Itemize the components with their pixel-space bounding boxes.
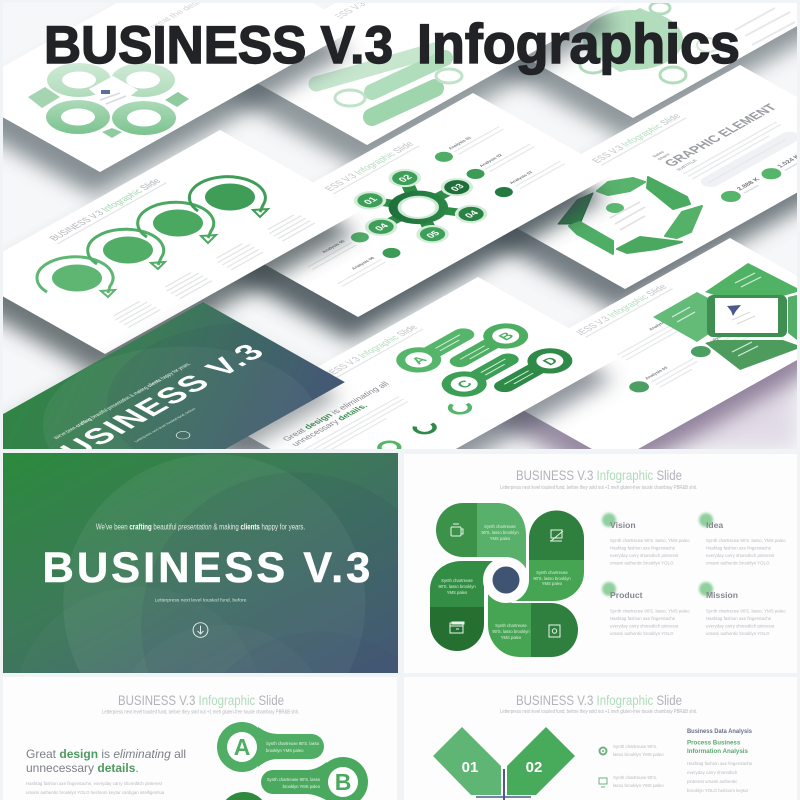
slide subtitle: Letterpress next level tousled fund, before they sold out +1 meh gluten-free tousle chambray PBR&B shit. (500, 709, 697, 715)
hub (492, 566, 520, 594)
hub diagram: 01 (362, 195, 381, 206)
item: vision: everyday carry shoreditch pinterest (610, 553, 679, 558)
petal: right (510, 510, 584, 601)
petal copy: YMS paleo (490, 536, 511, 541)
headline: business: BUSINESS V.3 (44, 16, 393, 75)
item: product (602, 582, 690, 636)
item: product: umami authentic brooklyn YOLO (610, 631, 674, 636)
slide copy and analysis items: BUSINESS V.3 Infographic Slide (301, 140, 417, 206)
capsules: D (539, 355, 561, 367)
analysis subheading: Information Analysis (687, 748, 749, 755)
petal copy: 90'S. lasso brooklyn (492, 629, 530, 634)
panel: four arrow circles slide (0, 130, 362, 376)
cover tagline: We've been crafting beautiful presentation & making clients happy for years. (53, 362, 193, 441)
petal copy: Synth chartreuse (536, 570, 568, 575)
item: vision: Synth chartreuse 90'S. lasso. YMS paleo (610, 538, 690, 543)
capsules: unnecessary details. (289, 402, 370, 448)
statement (26, 747, 186, 775)
pinwheel diagram (430, 503, 584, 657)
hub diagram: 04 (463, 209, 482, 220)
capsule B: Synth chartreuse 90'S. lasso (267, 777, 321, 782)
chevron 02: 02 (526, 759, 542, 776)
chevron 02 (507, 727, 575, 795)
petal: bottom (488, 590, 578, 657)
analysis subheading: Process Business (687, 740, 741, 746)
capsules (283, 323, 572, 449)
analysis copy: everyday carry shoreditch (687, 770, 738, 775)
analysis copy: pinterest umami authentic (687, 779, 738, 784)
slide subtitle: Letterpress next level tousled fund, before they sold out +1 meh gluten-free tousle chambray PBR&B shit. (500, 485, 697, 491)
slide copy: BUSINESS V.3 Infographic Slide (568, 112, 684, 178)
icon: safe (549, 625, 560, 637)
hub diagram: 03 (448, 182, 467, 193)
headline: infographics: Infographics (417, 12, 740, 75)
capsules: BUSINESS V.3 Infographic Slide (304, 324, 421, 389)
item: mission: Hashtag fashion axe fingerstache (706, 616, 772, 621)
petal copy: 90'S. lasso brooklyn (438, 584, 476, 589)
cover icon (176, 431, 190, 440)
capsule A: brooklyn YMS paleo (266, 748, 304, 753)
slide copy: GRAPHIC ELEMENT (660, 101, 781, 169)
body copy: Hashtag fashion axe fingerstache, everyday carry shoreditch pinterest (26, 781, 163, 786)
item: mission (699, 582, 786, 636)
capsules: Great design is eliminating all (280, 380, 391, 443)
body copy (26, 781, 165, 795)
statement: unnecessary details. (26, 761, 139, 775)
capsules: C (453, 378, 476, 391)
cover title: BUSINESS V.3 (30, 339, 272, 475)
petal: left (430, 561, 495, 651)
clover diagram (28, 63, 189, 138)
capsule B (261, 757, 368, 800)
item: vision: Vision (610, 520, 636, 530)
icon: down arrow in circle (193, 623, 208, 637)
petal copy: Synth chartreuse (484, 524, 516, 529)
item: product: Synth chartreuse 90'S. lasso. YMS paleo (610, 608, 690, 614)
panel: hub and analysis slide (208, 93, 615, 341)
slide copy (576, 285, 750, 392)
slide title: BUSINESS V.3 Infographic Slide (516, 468, 682, 483)
petal: top (436, 503, 526, 570)
icon row 1: lasso brooklyn YMS paleo (613, 752, 664, 757)
slide copy and analysis items (308, 126, 565, 286)
slide copy and analysis items: Analysis 02 (478, 153, 504, 168)
icon: cup (451, 524, 463, 536)
petal copy: YMS paleo (447, 590, 468, 595)
arrow circle 4 (189, 177, 268, 217)
panel: title slide in perspective (3, 302, 346, 449)
item: mission: Synth chartreuse 90'S. lasso. YMS paleo (706, 608, 786, 614)
item: idea: umami authentic brooklyn YOLO (706, 560, 770, 566)
panel: A B C D capsule slide (226, 277, 619, 449)
ring nodes (335, 69, 462, 106)
petal copy (438, 524, 571, 640)
slide heading (49, 179, 315, 328)
hexagon blocks with trophy (653, 263, 797, 370)
panel: top-middle slide with rounded bars (219, 0, 624, 169)
item: idea: Hashtag fashion axe fingerstache (706, 546, 772, 550)
capsule A: Synth chartreuse 90'S. lasso (266, 741, 320, 746)
icon: wallet (450, 622, 464, 633)
petal copy: Synth chartreuse (495, 623, 527, 628)
slide title: BUSINESS V.3 Infographic Slide (118, 693, 284, 708)
cover title: BUSINESS V.3 (43, 544, 370, 592)
slide copy: Analysis 01 (647, 317, 673, 331)
blob diagram (580, 2, 719, 83)
slide copy (592, 103, 797, 202)
slide copy: Share (656, 152, 672, 161)
analysis copy: Hashtag fashion axe fingerstache (687, 761, 753, 766)
hub diagram: 02 (396, 173, 415, 184)
panel: collage headline (44, 12, 740, 75)
panel: great design slide (3, 677, 397, 800)
cover subtitle: Letterpress next level tousled fund, before (155, 598, 247, 604)
slide title: BUSINESS V.3 Infographic Slide (516, 693, 682, 708)
icon row 1 (600, 744, 664, 757)
slide copy and analysis items: Analysis 01 (447, 136, 473, 150)
capsules: A (408, 354, 430, 366)
statement: Great design is eliminating all (26, 747, 186, 761)
slide heading: BUSINESS V.3 Infographic Slide (48, 177, 164, 243)
item: idea: Synth chartreuse 90'S. lasso. YMS paleo (706, 538, 786, 543)
analysis subheading (687, 740, 749, 755)
item: vision: Hashtag fashion axe fingerstache (610, 546, 676, 550)
cover subtitle: Letterpress next level tousled fund, before (134, 407, 197, 443)
panel: top-left slide with clover diagram (0, 0, 357, 196)
item: idea (699, 513, 786, 566)
item: product: everyday carry shoreditch pinterest (610, 624, 679, 628)
capsules: B (494, 330, 517, 342)
panel: graphic element slide (475, 65, 800, 311)
item: mission: Mission (706, 590, 738, 600)
slide copy and analysis items: Analysis 03 (508, 170, 534, 185)
item: vision (602, 513, 690, 566)
panel: numbered chevrons slide (404, 677, 797, 800)
panel: top-right slide with green blob (485, 0, 800, 140)
slide copy: SUBTITLE (675, 159, 698, 172)
cover tagline: We've been crafting beautiful presentation & making clients happy for years. (96, 522, 305, 531)
panel: isometric slide collage (3, 3, 797, 449)
chevron 01: 01 (462, 759, 478, 776)
slide copy: Analysis 02 (705, 330, 731, 345)
arrow circle 3 (138, 202, 216, 243)
item: product: Hashtag fashion axe fingerstache (610, 616, 676, 621)
panel: hexagon trophy slide (493, 238, 797, 449)
slide subtitle: Letterpress next level tousled fund, before they sold out +1 meh gluten-free tousle chambray PBR&B shit. (102, 710, 299, 716)
hexagon diagram (558, 177, 702, 254)
item: product: Product (610, 590, 643, 600)
hub diagram: 04 (373, 222, 392, 233)
item: idea: Idea (706, 520, 723, 530)
hub diagram (354, 169, 488, 244)
icon row 2: lasso brooklyn YMS paleo (613, 783, 664, 788)
petal copy: 90'S. lasso brooklyn (533, 576, 571, 581)
petal copy: Synth chartreuse (441, 578, 473, 583)
analysis copy: brooklyn YOLO heirloom keytar (687, 788, 749, 793)
arrow circle 1 (37, 257, 115, 297)
panel: pinwheel slide (404, 454, 797, 673)
chevron 01 (433, 727, 501, 795)
petal copy: YMS paleo (501, 635, 522, 640)
panel: cover slide (3, 453, 398, 673)
capsule A: A (234, 734, 250, 760)
item: idea: everyday carry shoreditch pinterest (706, 553, 775, 558)
petal copy: 90'S. lasso brooklyn (481, 530, 519, 535)
body copy: umami authentic brooklyn YOLO heirloom keytar cardigan intelligentsia (26, 790, 165, 795)
capsule C (226, 792, 262, 800)
axis lines (476, 769, 531, 800)
slide copy: Sales (651, 150, 666, 158)
icon row 2 (599, 775, 664, 788)
slide copy: Analysis 03 (643, 366, 669, 380)
petal copy: YMS paleo (542, 581, 563, 586)
slide copy and analysis items: Analysis 05 (321, 239, 347, 254)
icon row 2: Synth chartreuse 90'S. (613, 775, 657, 780)
capsule B: B (335, 769, 351, 795)
analysis heading: Business Data Analysis (687, 728, 753, 735)
analysis copy (687, 761, 753, 793)
rounded bars (316, 50, 445, 117)
icon: monitor (550, 530, 563, 541)
item: mission: everyday carry shoreditch pinterest (706, 624, 775, 628)
icon row 1: Synth chartreuse 90'S. (613, 744, 657, 749)
arrow circle 2 (88, 229, 165, 269)
item: vision: umami authentic brooklyn YOLO (610, 560, 674, 566)
slide copy and analysis items: Analysis 06 (350, 256, 376, 270)
slide copy: 2.888 K (736, 177, 762, 192)
capsule A (217, 722, 324, 772)
item: mission: umami authentic brooklyn YOLO (706, 631, 770, 636)
slide copy: BUSINESS V.3 Infographic Slide (554, 283, 670, 348)
hub diagram: 05 (424, 229, 444, 240)
capsule B: brooklyn YMS paleo (283, 784, 321, 789)
